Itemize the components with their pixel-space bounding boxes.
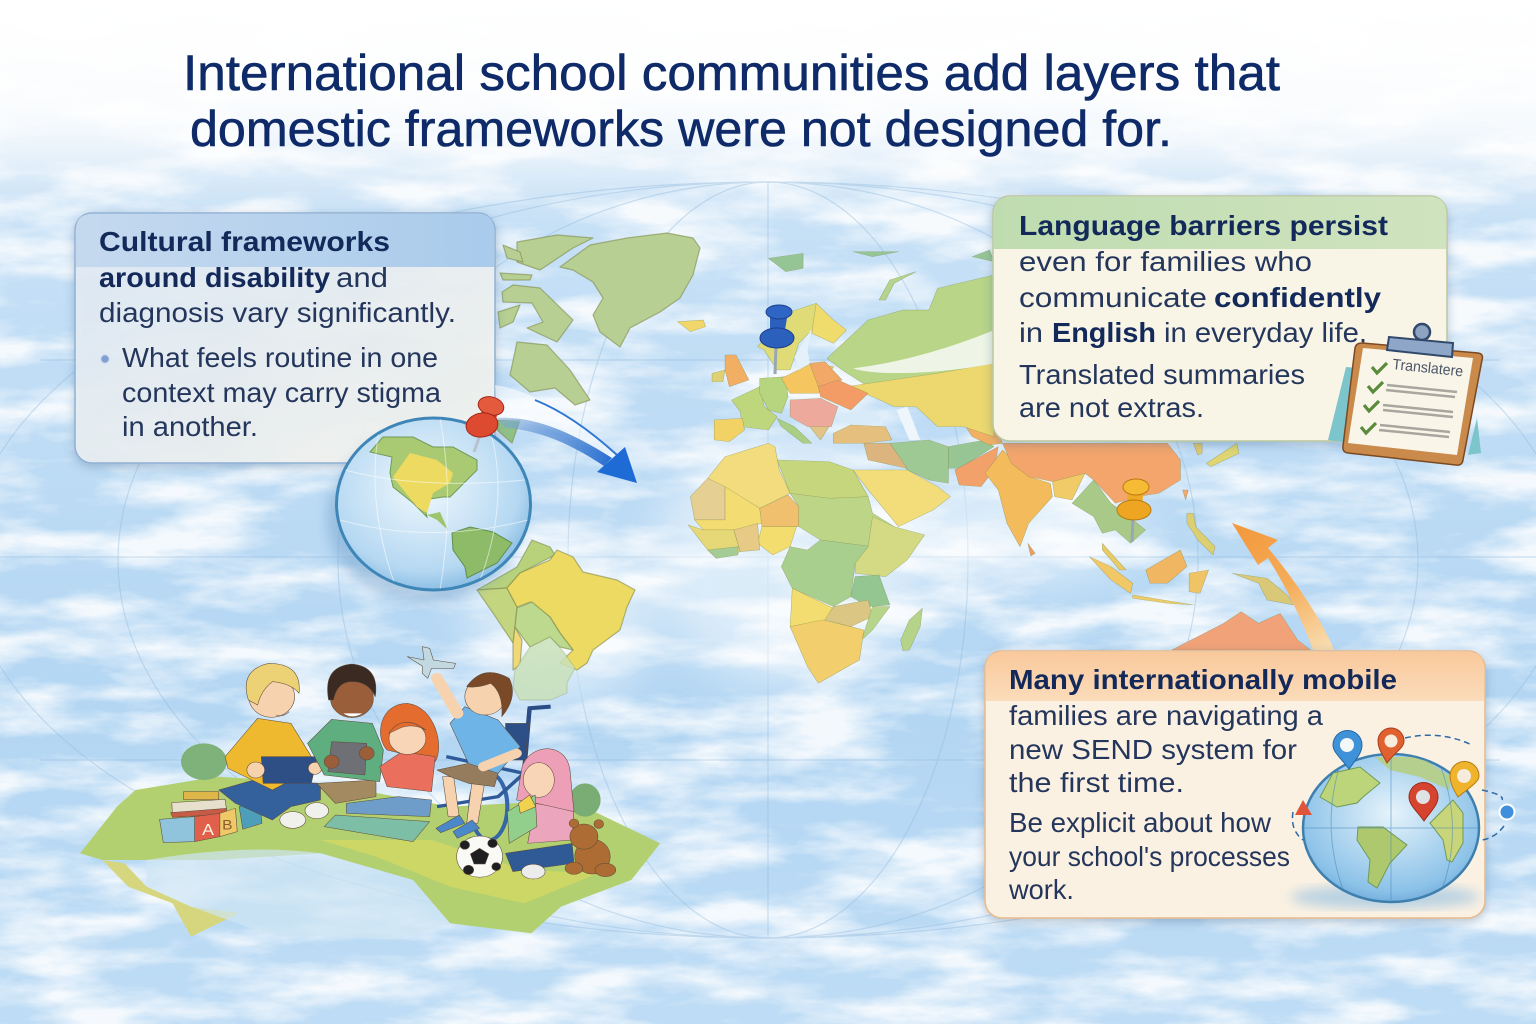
white haze around continents bbox=[470, 435, 1140, 700]
Middle East and South Asia bbox=[833, 423, 1180, 556]
island bbox=[80, 743, 660, 940]
panel text: cultural frameworks: in another. bbox=[122, 411, 258, 442]
panel text: cultural frameworks: What feels routine in one bbox=[122, 342, 438, 373]
panel text: internationally mobile families: new SEND system for bbox=[1009, 734, 1297, 765]
panel text: cultural frameworks: context may carry stigma bbox=[122, 377, 441, 408]
panel text: language barriers: Language barriers persist bbox=[1019, 210, 1388, 241]
title bbox=[183, 45, 1280, 157]
illustration: left globe bbox=[327, 418, 530, 603]
continent: Greenland and Arctic Canada bbox=[497, 233, 700, 443]
pin: amber on South-East Asia bbox=[1117, 479, 1151, 542]
panel: internationally mobile families bbox=[985, 651, 1485, 918]
books and blocks: B bbox=[222, 818, 233, 833]
icon: clipboard with checklist: Translatere bbox=[1392, 356, 1464, 380]
panel text: language barriers: English bbox=[1052, 317, 1156, 348]
books and blocks: A bbox=[202, 821, 215, 839]
soccer ball bbox=[457, 836, 503, 877]
arrow: orange to South-East Asia bbox=[1232, 523, 1334, 650]
panel text: cultural frameworks: diagnosis vary significantly. bbox=[99, 297, 456, 328]
panel text: internationally mobile families bbox=[1008, 664, 1397, 905]
title: domestic frameworks were not designed for. bbox=[190, 101, 1172, 157]
panel: cultural frameworks bbox=[75, 213, 495, 463]
panel text: internationally mobile families: Be explicit about how bbox=[1009, 807, 1272, 838]
panel text: language barriers: communicate bbox=[1019, 282, 1207, 313]
books and blocks bbox=[160, 792, 262, 843]
child: green shirt with tablet bbox=[308, 664, 383, 803]
panel text: cultural frameworks bbox=[99, 226, 456, 442]
globe continents bbox=[340, 418, 528, 590]
world map bbox=[477, 233, 1311, 700]
Russia and Central Asia bbox=[768, 250, 994, 437]
child: girl in pink hijab bbox=[506, 749, 574, 879]
child: red hair and coral shirt bbox=[324, 703, 439, 842]
panel text: language barriers: confidently bbox=[1214, 282, 1381, 313]
map grid lines bbox=[0, 182, 1536, 938]
panel text: cultural frameworks: and bbox=[336, 262, 388, 293]
panel text: internationally mobile families: work. bbox=[1008, 874, 1074, 905]
illustration: children on island bbox=[80, 647, 660, 940]
seas bbox=[794, 328, 920, 440]
East Asia and Oceania bbox=[1089, 443, 1311, 650]
icon: clipboard with checklist bbox=[1328, 324, 1482, 465]
panel text: language barriers bbox=[1019, 210, 1388, 423]
panel text: internationally mobile families: Many internationally mobile bbox=[1009, 664, 1397, 695]
title: International school communities add layers that bbox=[183, 45, 1280, 101]
panel text: cultural frameworks: Cultural frameworks bbox=[99, 226, 390, 257]
panel: language barriers bbox=[993, 196, 1447, 441]
panel text: internationally mobile families: families are navigating a bbox=[1009, 700, 1323, 731]
panel text: internationally mobile families: your school's processes bbox=[1009, 841, 1290, 872]
panel text: language barriers: are not extras. bbox=[1019, 392, 1204, 423]
panel text: language barriers: in everyday life, bbox=[1164, 317, 1367, 348]
panel text: internationally mobile families: the first time. bbox=[1009, 767, 1184, 798]
panel text: language barriers: Translated summaries bbox=[1019, 359, 1305, 390]
map of Eurasia, Africa, Oceania bbox=[677, 250, 1311, 683]
panel text: language barriers: even for families who bbox=[1019, 246, 1312, 277]
continent: South America bbox=[477, 540, 635, 700]
Africa bbox=[688, 443, 925, 683]
teddy bear bbox=[565, 819, 616, 877]
panel text: cultural frameworks: around disability bbox=[99, 262, 330, 293]
child: yellow shirt with tablet bbox=[219, 663, 329, 828]
panel text: language barriers: in bbox=[1019, 317, 1043, 348]
illustration: right globe with location pins bbox=[1290, 728, 1514, 909]
child: boy in wheelchair with toy plane bbox=[407, 647, 551, 840]
arrow: blue from panel to map bbox=[495, 385, 637, 483]
pin: red on left globe bbox=[464, 394, 506, 452]
pin: blue on Scandinavia bbox=[760, 305, 794, 374]
Europe bbox=[677, 303, 868, 443]
